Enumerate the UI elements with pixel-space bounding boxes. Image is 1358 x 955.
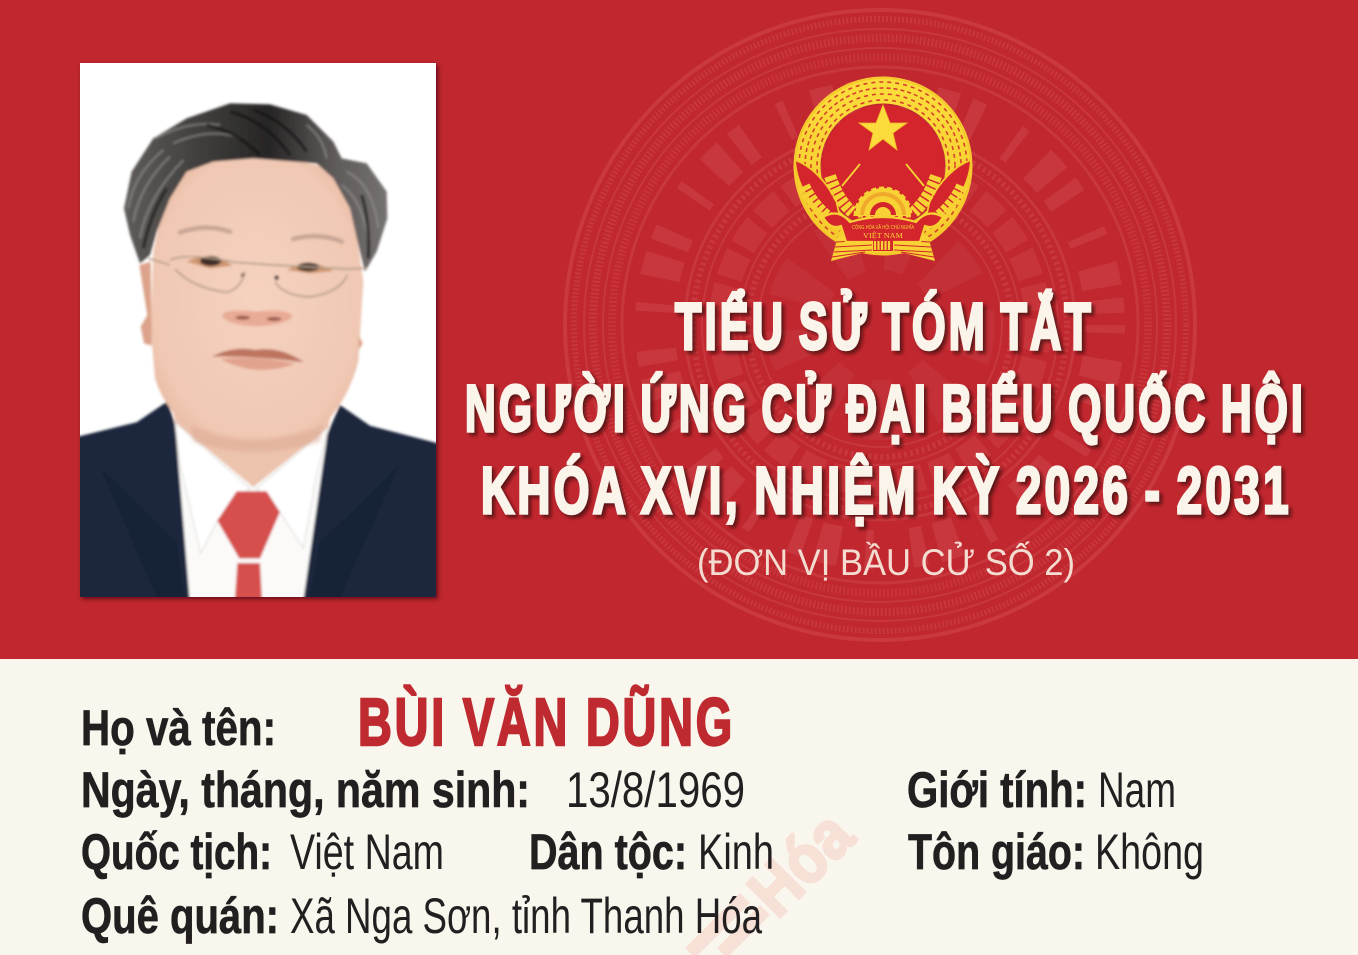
- shirt: [174, 434, 330, 597]
- birth date and gender row: [81, 762, 1176, 818]
- wheat branches: [804, 164, 962, 226]
- tie: [217, 491, 280, 612]
- cream info panel: [0, 659, 1358, 955]
- nationality, ethnicity and religion row: [81, 824, 1204, 880]
- nose: [222, 311, 293, 326]
- red header panel: [0, 0, 1358, 659]
- watermark: Hóa: [734, 796, 868, 930]
- wheat ring: [795, 78, 971, 254]
- nationality, ethnicity and religion row: Quốc tịch:: [81, 824, 272, 880]
- birth date and gender row: Ngày, tháng, năm sinh:: [81, 762, 530, 818]
- full name row: [81, 685, 735, 760]
- base rays: [831, 236, 935, 261]
- birth date and gender row: Nam: [1098, 762, 1176, 818]
- eyebrows: [180, 228, 342, 242]
- suit jacket: [80, 401, 436, 597]
- hometown row: [81, 888, 762, 944]
- gear: [855, 188, 911, 216]
- base banner with name: CỘNG HÒA XÃ HỘI CHỦ NGHĨA: [852, 224, 915, 231]
- hair: [124, 103, 387, 272]
- birth date and gender row: 13/8/1969: [566, 762, 745, 818]
- biography fields: [81, 685, 1204, 944]
- title: [465, 289, 1306, 527]
- nationality, ethnicity and religion row: Tôn giáo:: [908, 824, 1085, 880]
- watermark: [690, 796, 868, 953]
- nationality, ethnicity and religion row: Việt Nam: [290, 824, 444, 880]
- bronze drum background pattern: [565, 10, 1195, 640]
- full name row: BÙI VĂN DŨNG: [358, 685, 735, 760]
- national emblem: [795, 78, 971, 261]
- hometown row: Quê quán:: [81, 888, 279, 944]
- eyes: [187, 256, 333, 273]
- nationality, ethnicity and religion row: Dân tộc:: [529, 824, 687, 880]
- glasses: [148, 257, 367, 297]
- full name row: Họ và tên:: [81, 700, 276, 756]
- ears: [139, 262, 152, 346]
- title line 1: TIỂU SỬ TÓM TẮT: [675, 289, 1094, 363]
- nationality, ethnicity and religion row: Không: [1095, 824, 1204, 880]
- face: [151, 152, 363, 443]
- mouth: [212, 349, 304, 370]
- star: [859, 105, 907, 150]
- portrait photo: [73, 63, 443, 612]
- base banner with name: [823, 213, 943, 251]
- birth date and gender row: Giới tính:: [907, 762, 1087, 818]
- red field: [822, 105, 944, 227]
- lapel shadow: [100, 464, 400, 612]
- red ribbons: [795, 160, 971, 226]
- collar: [175, 422, 328, 553]
- nationality, ethnicity and religion row: Kinh: [698, 824, 774, 880]
- chin shadow: [190, 425, 323, 452]
- neck: [171, 413, 332, 488]
- constituency subtitle: (ĐƠN VỊ BẦU CỬ SỐ 2): [697, 541, 1075, 583]
- hometown row: Xã Nga Sơn, tỉnh Thanh Hóa: [290, 888, 762, 944]
- base banner with name: VIỆT NAM: [863, 230, 903, 240]
